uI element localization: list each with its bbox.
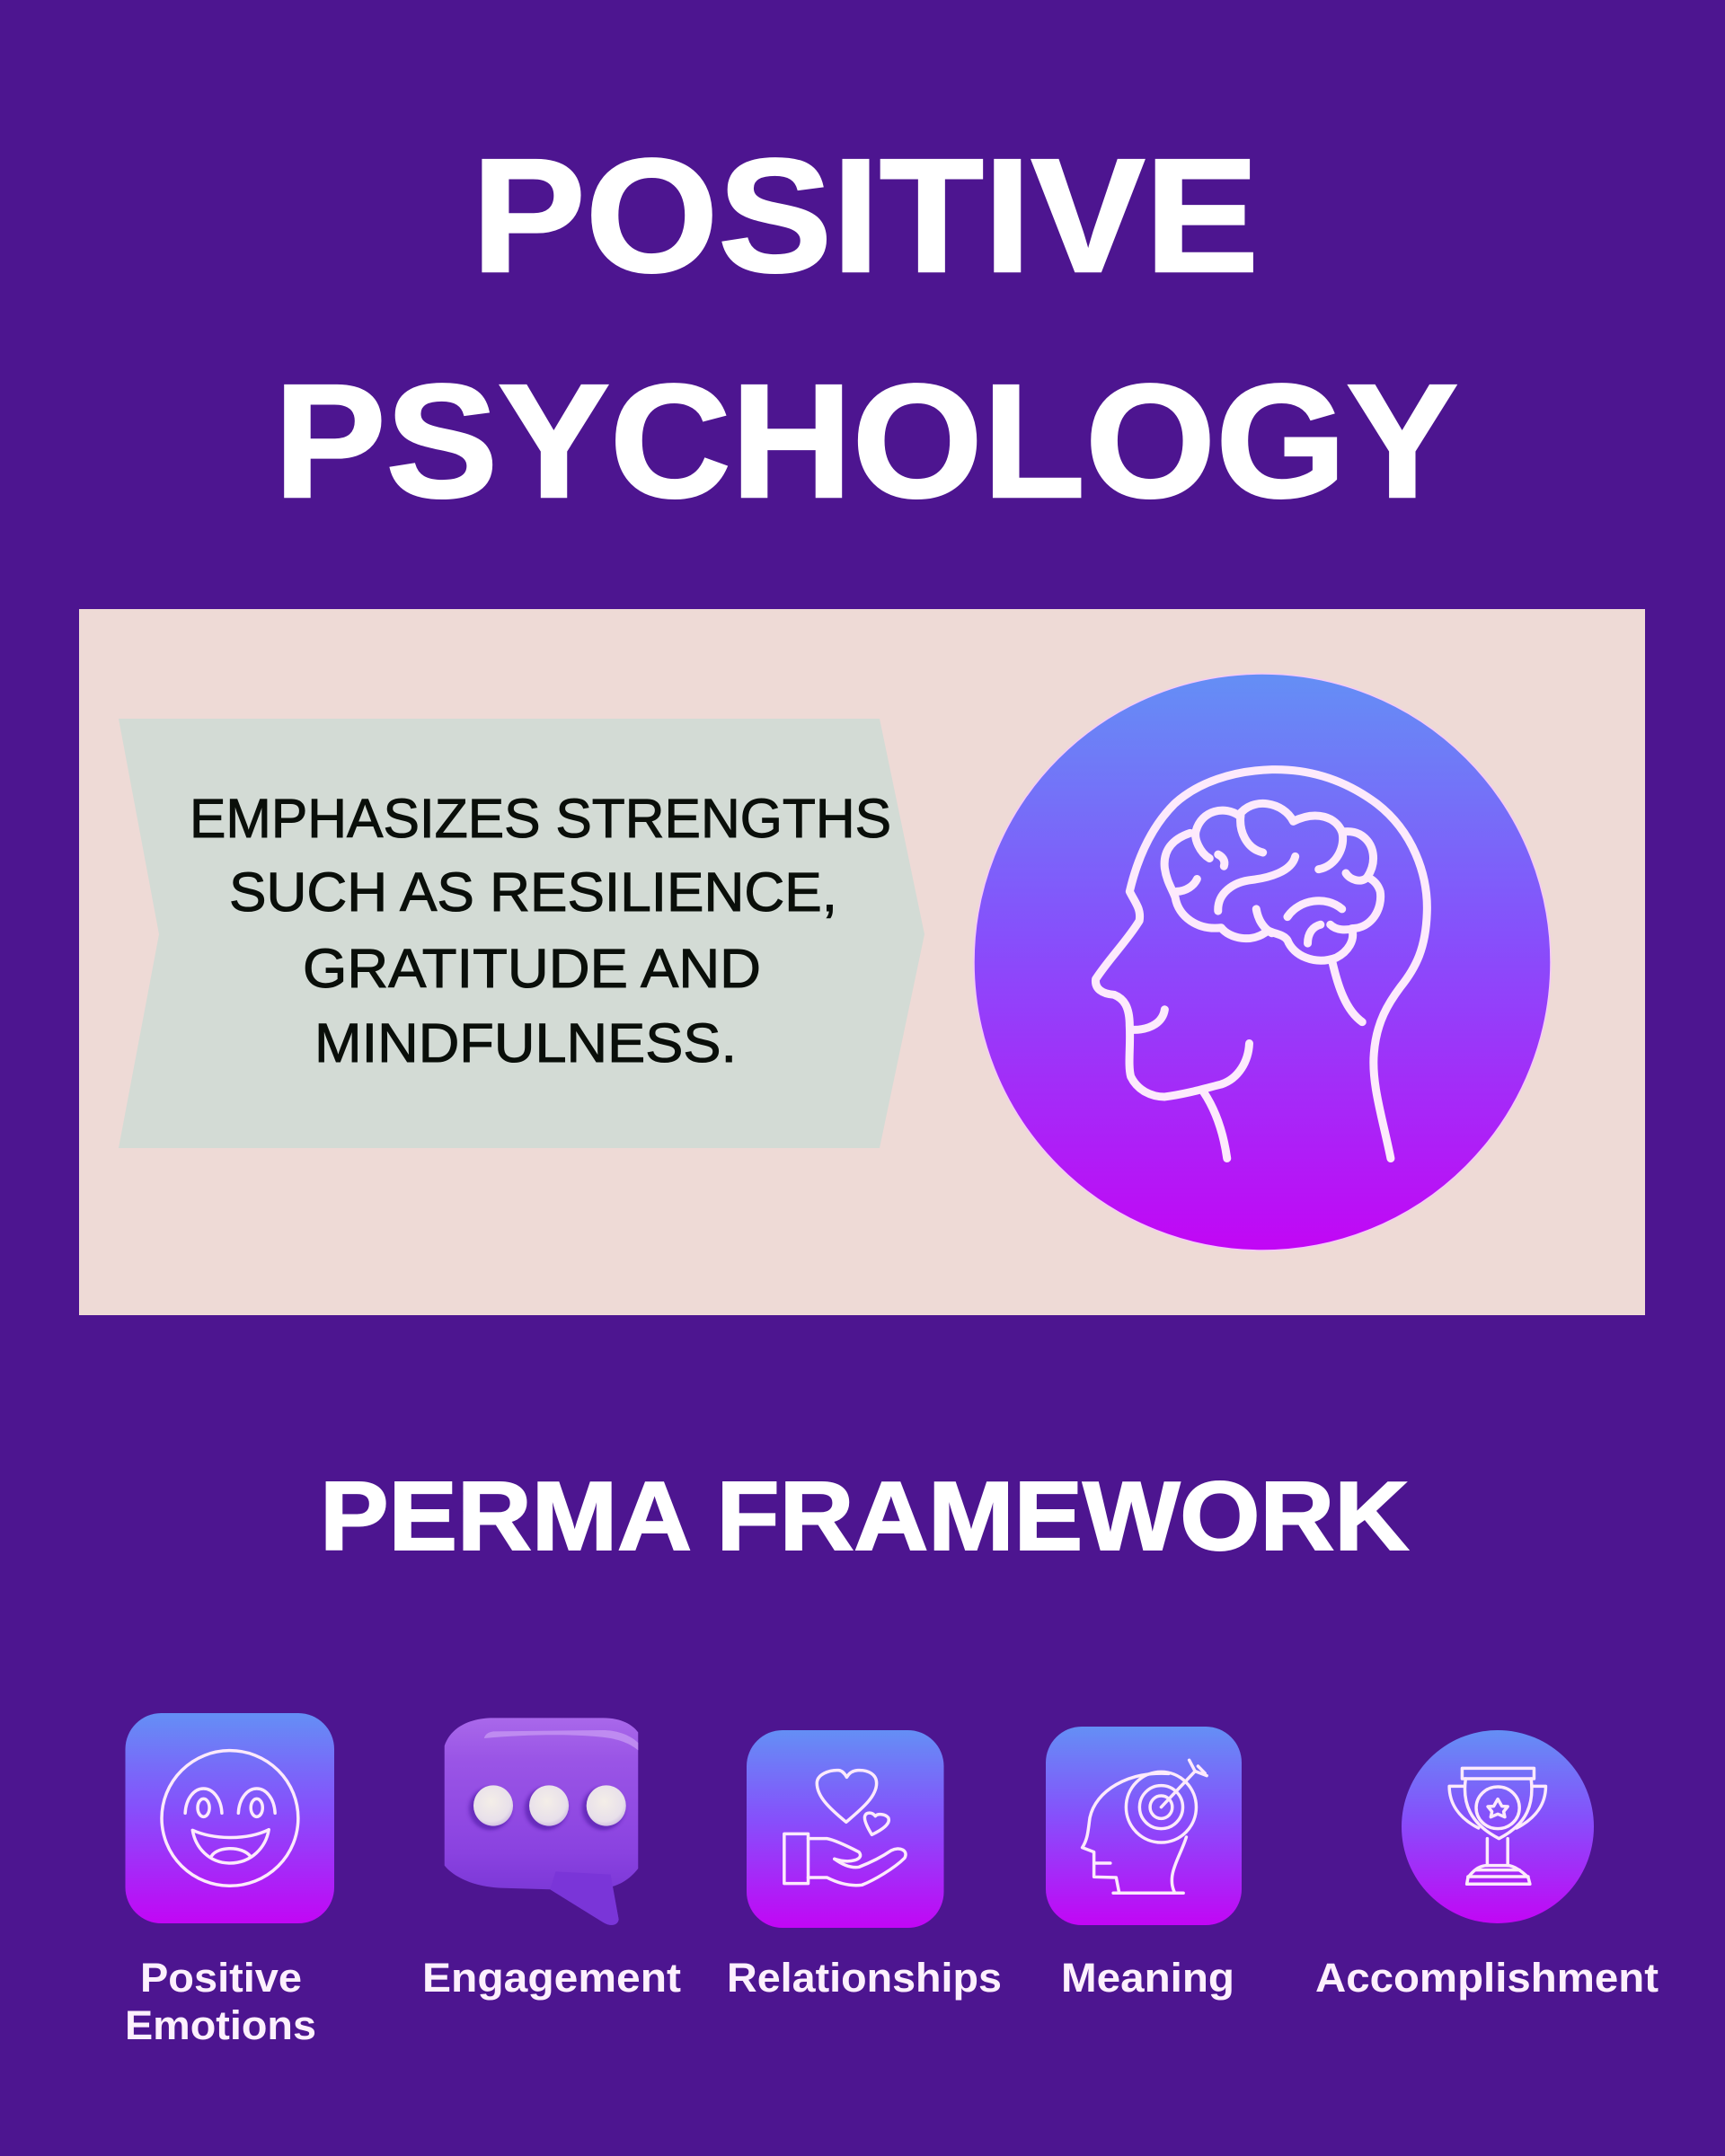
icon: hand holding hearts: [784, 1771, 906, 1886]
label: Meaning: [1061, 1955, 1234, 2001]
framework item: Accomplishment: [1315, 1730, 1659, 2001]
dots: [473, 1785, 626, 1826]
line 1: EMPHASIZES STRENGTHS: [190, 788, 891, 849]
panel background: [79, 609, 1645, 1315]
label line 2: Emotions: [125, 2002, 316, 2048]
dot shadows: [469, 1787, 624, 1830]
icon: head with target: [1083, 1760, 1207, 1893]
icon tile: [1046, 1727, 1242, 1925]
bubble body: [445, 1718, 638, 1925]
icon: head and brain in gradient circle: [974, 674, 1551, 1250]
line 2: SUCH AS RESILIENCE,: [229, 862, 837, 923]
bubble tail shade: [550, 1871, 619, 1925]
icon: smiley face: [162, 1751, 298, 1886]
line 4: MINDFULNESS.: [314, 1012, 737, 1074]
title line: PSYCHOLOGY: PSYCHOLOGY: [274, 351, 1458, 532]
framework item: Meaning: [1046, 1727, 1242, 2001]
title: [274, 126, 1458, 532]
framework item: Positive Emotions: [125, 1713, 334, 2048]
arrow banner: [119, 719, 924, 1148]
line 3: GRATITUDE AND: [303, 938, 761, 999]
label: Relationships: [727, 1955, 1002, 2001]
banner text: [190, 788, 891, 1074]
bubble highlight: [484, 1730, 638, 1750]
heading: PERMA FRAMEWORK: PERMA FRAMEWORK: [320, 1462, 1409, 1571]
label: Accomplishment: [1315, 1955, 1659, 2001]
panel: definition: [79, 609, 1645, 1315]
title line: POSITIVE: POSITIVE: [472, 126, 1259, 306]
label line 1: Positive: [140, 1955, 302, 2001]
icon: trophy: [1449, 1768, 1545, 1884]
framework item: Engagement: [422, 1718, 681, 2001]
head and brain line art: [1095, 770, 1427, 1158]
icon tile: [747, 1730, 943, 1928]
icon disc: [1402, 1730, 1594, 1923]
label: Engagement: [422, 1955, 681, 2001]
icon: 3D speech bubble: [445, 1718, 638, 1925]
icon tile: [126, 1713, 334, 1923]
framework item: Relationships: [727, 1730, 1002, 2001]
gradient circle: [974, 674, 1551, 1250]
label: [125, 1955, 316, 2048]
